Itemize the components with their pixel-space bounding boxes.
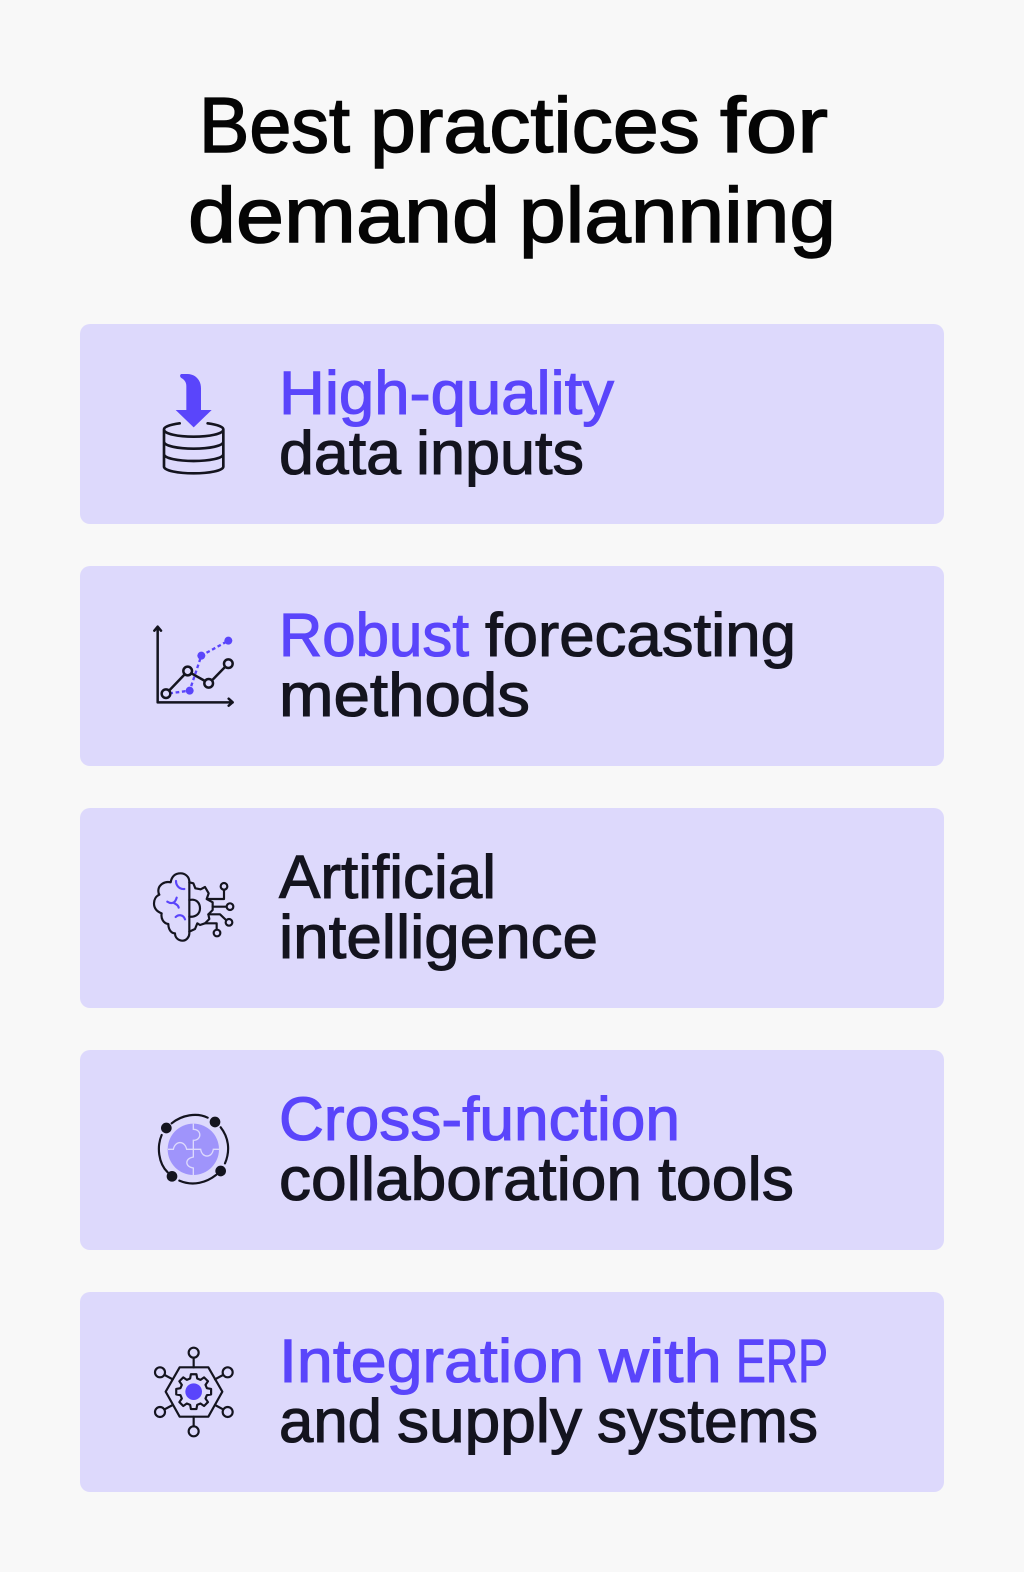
title	[188, 81, 836, 259]
heading: cross-function collaboration tools	[279, 1085, 794, 1213]
heading: high-quality data inputs: inputs	[416, 419, 584, 487]
heading: integration with ERP and supply systems: ERP	[736, 1327, 828, 1395]
heading: integration with ERP and supply systems: and	[279, 1387, 382, 1455]
heading: cross-function collaboration tools: tools	[658, 1145, 794, 1213]
heading: integration with ERP and supply systems: supply	[397, 1387, 583, 1455]
icon: arrow into database	[164, 374, 223, 473]
heading: integration with ERP and supply systems: systems	[597, 1387, 818, 1455]
title: planning	[519, 171, 836, 259]
panel: artificial intelligence	[80, 808, 944, 1008]
panel: high-quality data inputs	[80, 324, 944, 524]
title: Best	[199, 81, 350, 169]
heading: integration with ERP and supply systems	[279, 1327, 828, 1455]
heading: high-quality data inputs: data	[279, 419, 401, 487]
heading: cross-function collaboration tools: collaboration	[279, 1145, 642, 1213]
heading: high-quality data inputs: High-quality	[279, 359, 615, 427]
heading: artificial intelligence: Artificial	[279, 843, 496, 911]
heading: integration with ERP and supply systems: Integration	[279, 1327, 584, 1395]
icon: line chart	[154, 627, 233, 706]
title: for	[720, 81, 828, 169]
panel: integration with ERP and supply systems	[80, 1292, 944, 1492]
heading: artificial intelligence: intelligence	[279, 903, 598, 971]
heading: integration with ERP and supply systems: with	[598, 1327, 722, 1395]
icon: gear in hexagon network	[155, 1348, 233, 1436]
heading: artificial intelligence	[279, 843, 598, 971]
heading: robust forecasting methods: methods	[279, 661, 530, 729]
heading: cross-function collaboration tools: Cross-function	[279, 1085, 680, 1153]
heading: robust forecasting methods: Robust	[279, 601, 469, 669]
title: demand	[188, 171, 500, 259]
panel: robust forecasting methods	[80, 566, 944, 766]
heading: robust forecasting methods	[279, 601, 796, 729]
title: practices	[370, 81, 700, 169]
icon: puzzle in ring	[159, 1115, 228, 1183]
icon: brain with circuits	[154, 873, 233, 941]
panel: cross-function collaboration tools	[80, 1050, 944, 1250]
heading: robust forecasting methods: forecasting	[485, 601, 796, 669]
heading: high-quality data inputs	[279, 359, 615, 487]
